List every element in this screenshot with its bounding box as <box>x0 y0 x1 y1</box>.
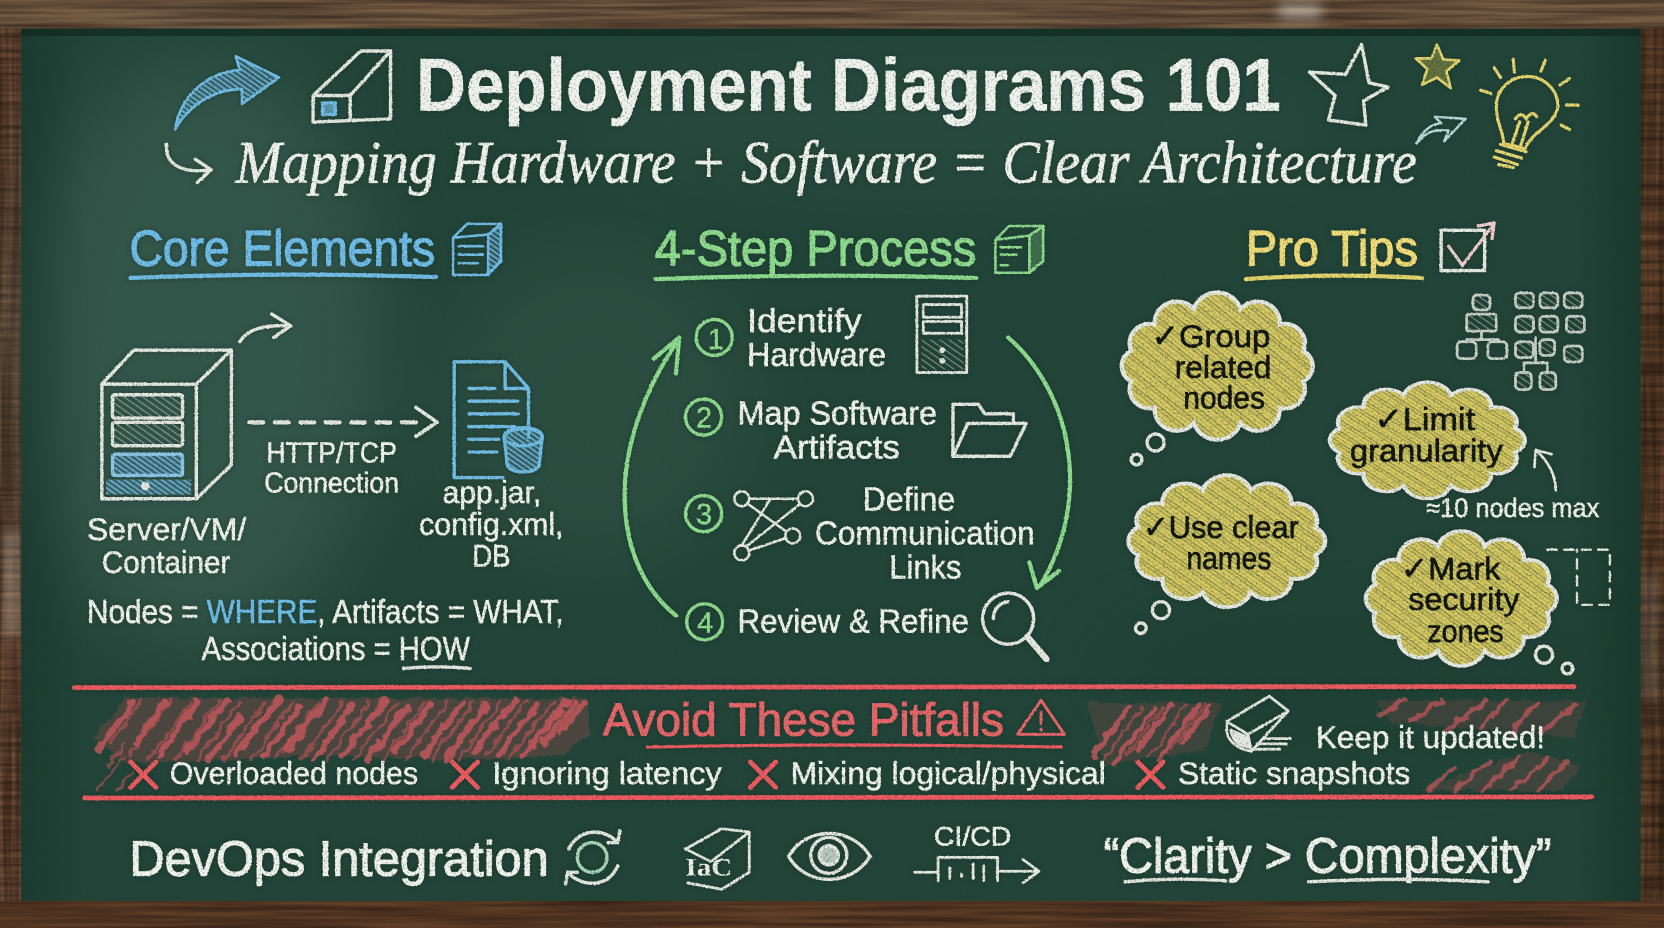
devops heading: DevOps Integration <box>129 832 549 886</box>
tip: mark security zones: security <box>1408 581 1520 617</box>
artifact label: DB <box>472 538 510 574</box>
icon: small curved arrow <box>240 314 291 342</box>
tip: use clear names: names <box>1186 540 1271 576</box>
icon: dashed security zone <box>1547 550 1610 605</box>
icon: checkbox <box>1441 223 1494 271</box>
bottom rule <box>85 797 1592 799</box>
step 2: Artifacts <box>774 428 900 465</box>
pitfall: ignoring latency: Ignoring latency <box>492 755 722 791</box>
tip: limit granularity <box>1330 382 1525 499</box>
heading underline <box>647 745 1061 747</box>
summary text: Nodes = WHERE, Artifacts = WHAT, <box>87 593 564 630</box>
node label: Container <box>102 544 231 580</box>
artifact label: app.jar, <box>443 474 541 510</box>
icon: small arrow near subtitle <box>1417 117 1466 143</box>
top rule <box>74 686 1574 689</box>
icon: cycle <box>566 831 620 884</box>
icon: artifact document and database <box>454 362 542 478</box>
tip: group related nodes: related <box>1175 349 1271 385</box>
step 3: Links <box>889 548 961 585</box>
step 3: 3 <box>696 499 712 531</box>
step 2: Map Software <box>738 394 937 431</box>
tip: mark security zones: zones <box>1427 613 1504 649</box>
step 4: Review & Refine <box>738 602 969 639</box>
step 2: 2 <box>696 403 712 435</box>
icon: eye <box>788 833 870 879</box>
heading: 4-step process: 4-Step Process <box>655 220 976 276</box>
icon: network links <box>734 491 813 560</box>
icon: outline star <box>1310 45 1388 125</box>
pitfall: overloaded nodes: Overloaded nodes <box>170 755 418 791</box>
panel: core elements <box>87 220 564 669</box>
icon: folder <box>953 404 1026 456</box>
heading: avoid these pitfalls: Avoid These Pitfalls <box>603 693 1004 745</box>
dashed connection arrow <box>249 407 437 436</box>
panel: pro tips <box>1122 220 1610 674</box>
tip: mark security zones: ✓Mark <box>1401 550 1501 586</box>
icon: arrow to limit <box>1535 450 1556 490</box>
step 1: 1 <box>708 324 724 356</box>
node limit note: ≈10 nodes max <box>1426 493 1599 523</box>
icon: server node <box>102 350 231 499</box>
panel: 4-step process <box>625 220 1070 659</box>
cycle arrow right <box>1008 337 1070 588</box>
icon: deployment box <box>313 51 391 122</box>
tip: group related nodes: ✓Group <box>1151 318 1270 354</box>
icon: IaC box: IaC <box>686 852 732 881</box>
icon: tower server <box>917 296 967 372</box>
icon: warning triangle <box>1018 700 1064 734</box>
panel: avoid these pitfalls <box>74 686 1592 799</box>
heading: pro tips: Pro Tips <box>1246 220 1418 276</box>
heading underline <box>656 276 976 279</box>
icon: yellow star <box>1416 45 1459 88</box>
pitfall: mixing logical/physical: Mixing logical/physical <box>791 755 1106 791</box>
icon: CI/CD pipeline <box>915 822 1039 883</box>
icon: eraser <box>1227 696 1290 751</box>
artifact label: config.xml, <box>419 506 564 542</box>
step 3 <box>686 480 1035 585</box>
heading: core elements: Core Elements <box>129 220 435 276</box>
icon: CI/CD pipeline: CI/CD <box>934 822 1011 852</box>
icon: IaC box <box>686 829 749 889</box>
connection label <box>264 438 399 499</box>
tip: group related nodes: nodes <box>1183 380 1265 416</box>
artifact label <box>419 474 564 574</box>
tip: limit granularity: ✓Limit <box>1374 401 1475 437</box>
tip: group related nodes <box>1122 292 1313 465</box>
node label <box>87 511 246 580</box>
tip: limit granularity: granularity <box>1350 433 1503 469</box>
step 3: Define <box>863 480 955 517</box>
icon: curly arrow <box>166 144 211 183</box>
pitfall: static snapshots: Static snapshots <box>1178 755 1410 791</box>
cycle arrow left <box>625 337 679 615</box>
icon: blue server cube <box>453 224 501 275</box>
tip: use clear names: ✓Use clear <box>1143 509 1299 545</box>
tip: use clear names <box>1128 475 1325 634</box>
summary text: Associations = HOW <box>202 630 470 667</box>
icon: magnifier <box>983 593 1046 659</box>
step 4: 4 <box>697 607 713 639</box>
eraser note: Keep it updated! <box>1316 719 1545 755</box>
icon: light bulb <box>1480 59 1578 168</box>
heading underline <box>1246 276 1422 279</box>
title: Deployment Diagrams 101 <box>416 43 1281 126</box>
subtitle: Mapping Hardware + Software = Clear Architecture <box>235 130 1417 197</box>
hatching <box>93 696 1587 791</box>
connection label: HTTP/TCP <box>266 438 397 470</box>
step 3: Communication <box>815 514 1035 551</box>
connection label: Connection <box>264 467 399 499</box>
step 1: Identify <box>747 302 862 339</box>
step 1 <box>696 302 886 373</box>
footer: devops integration <box>129 822 1552 889</box>
step 1: Hardware <box>747 336 886 373</box>
icon: grouped nodes <box>1457 293 1584 389</box>
icon: green box <box>995 226 1043 273</box>
tip: mark security zones <box>1366 531 1573 674</box>
step 2 <box>686 394 937 465</box>
header <box>166 43 1578 197</box>
icon: blue curved arrow <box>175 56 279 129</box>
quote: “Clarity > Complexity” <box>1104 829 1552 883</box>
heading underline <box>131 275 436 278</box>
node label: Server/VM/ <box>87 511 246 547</box>
summary text <box>87 593 564 669</box>
